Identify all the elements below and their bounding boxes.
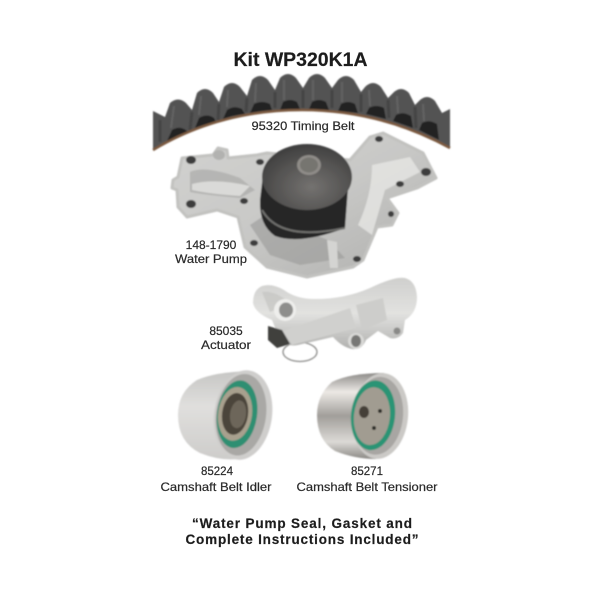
water pump label xyxy=(175,238,247,266)
actuator label xyxy=(201,324,251,352)
tensioner label: 85271 xyxy=(351,466,383,478)
actuator label: 85035 xyxy=(209,324,243,338)
included parts note xyxy=(186,516,418,547)
camshaft belt tensioner xyxy=(317,370,412,462)
tensioner label: Camshaft Belt Tensioner xyxy=(296,480,438,494)
tensioner label xyxy=(296,466,438,494)
camshaft belt idler xyxy=(178,366,278,464)
water pump label: 148-1790 xyxy=(186,238,237,252)
actuator label: Actuator xyxy=(201,338,251,352)
idler label: 85224 xyxy=(201,466,234,478)
title: Kit WP320K1A xyxy=(234,50,368,71)
included parts note: “Water Pump Seal, Gasket and xyxy=(192,516,412,531)
timing belt xyxy=(153,74,450,150)
idler label xyxy=(160,466,272,494)
idler label: Camshaft Belt Idler xyxy=(160,480,272,494)
actuator xyxy=(253,278,417,362)
included parts note: Complete Instructions Included” xyxy=(186,532,418,547)
timing belt label: 95320 Timing Belt xyxy=(252,119,355,133)
water pump label: Water Pump xyxy=(175,252,247,266)
water pump xyxy=(172,133,436,277)
